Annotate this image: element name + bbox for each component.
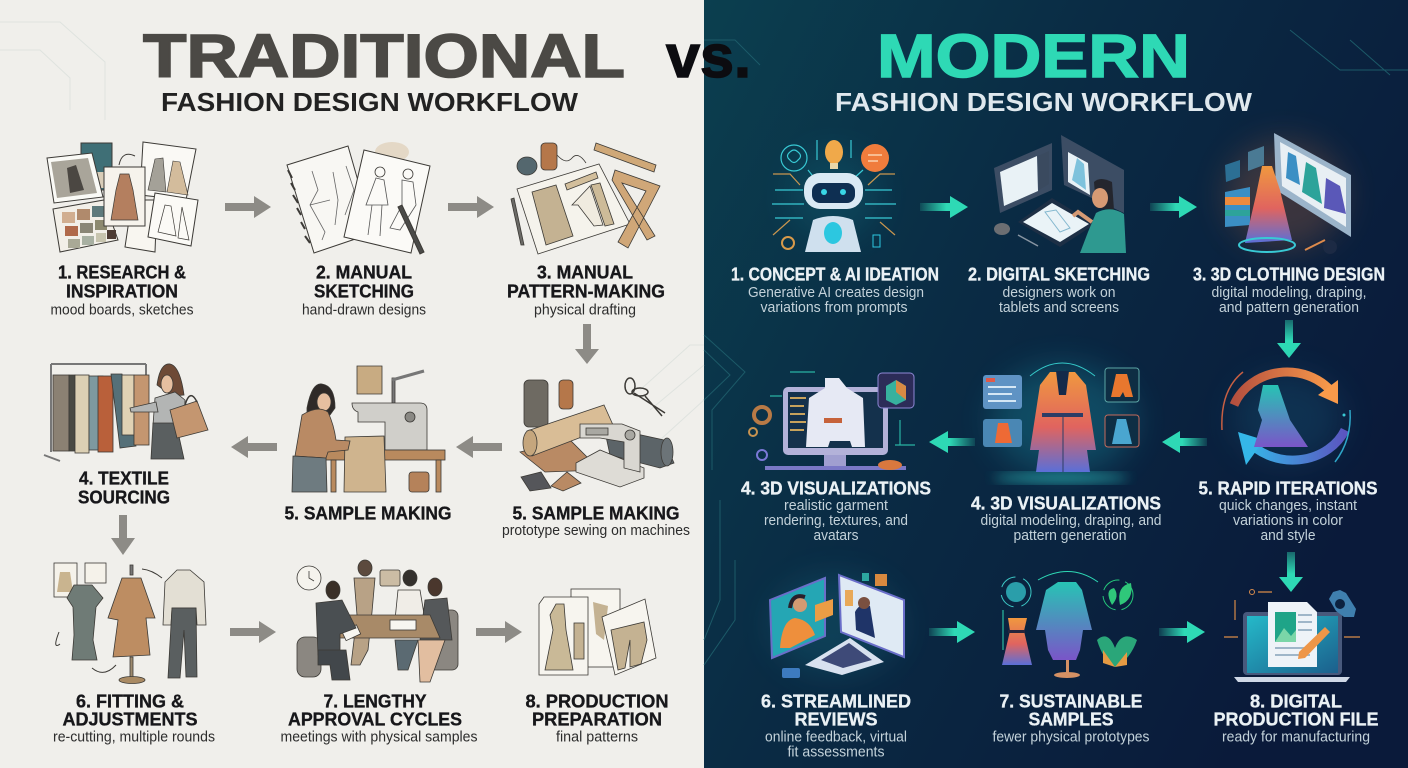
label: 3D visualizations coat: 4. 3D VISUALIZATIONS xyxy=(971,494,1161,514)
arrow: modern step 1 to 2 xyxy=(920,196,968,218)
label: sustainable samples xyxy=(992,692,1150,746)
icon: seamstress at sewing machine xyxy=(292,366,445,492)
step 8: production preparation xyxy=(526,589,668,746)
arrow: step 2 to 3 xyxy=(448,196,494,218)
label: digital sketching xyxy=(968,264,1150,316)
arrow: step 6 to 7 xyxy=(230,621,276,643)
label: sample making with machines: prototype sewing on machines xyxy=(502,523,690,539)
step 5: sample making seamstress xyxy=(284,366,452,524)
arrow: modern step 3 down xyxy=(1277,320,1301,358)
label: textile sourcing: 4. TEXTILE xyxy=(79,468,169,488)
arrow: sewing to textile sourcing xyxy=(231,436,277,458)
label: streamlined reviews: online feedback, virtual xyxy=(765,730,907,746)
label: concept and AI ideation: 1. CONCEPT & AI IDEATION xyxy=(731,264,939,284)
label: production preparation: PREPARATION xyxy=(532,710,662,730)
icon: jacket on monitor xyxy=(749,372,915,470)
icon: glowing 3D coat with panels xyxy=(983,363,1139,482)
label: 3D clothing design: digital modeling, draping, xyxy=(1212,285,1366,301)
label: digital production file xyxy=(1214,692,1378,746)
label: sample making: 5. SAMPLE MAKING xyxy=(284,504,452,524)
label: 3D clothing design xyxy=(1193,264,1385,316)
arrow: step 3 down xyxy=(575,324,599,364)
step 8: digital production file xyxy=(1214,590,1378,746)
step 6: fitting and adjustments xyxy=(53,563,215,746)
label: concept and AI ideation: Generative AI creates design xyxy=(748,285,924,301)
label: sustainable samples: fewer physical prototypes xyxy=(992,730,1150,746)
label: digital production file: ready for manufacturing xyxy=(1222,730,1370,746)
panel: modern background xyxy=(704,0,1408,768)
label: research and inspiration: 1. RESEARCH & xyxy=(58,262,186,282)
subtitle: modern: FASHION DESIGN WORKFLOW xyxy=(835,87,1252,117)
label: 3D visualizations coat: pattern generation xyxy=(1014,528,1126,544)
label: digital sketching: 2. DIGITAL SKETCHING xyxy=(968,264,1150,284)
icon: meeting with samples xyxy=(297,560,458,682)
step 1: concept and AI ideation xyxy=(731,140,939,316)
label: streamlined reviews: REVIEWS xyxy=(794,710,878,730)
title: vs.: vs. xyxy=(666,23,751,90)
arrow: modern step 5 down xyxy=(1279,552,1303,592)
label: textile sourcing: SOURCING xyxy=(78,488,170,508)
label: sample making with machines: 5. SAMPLE MAKING xyxy=(512,504,680,524)
step 7: sustainable samples xyxy=(992,571,1150,746)
label: manual sketching: hand-drawn designs xyxy=(302,302,426,318)
label: production preparation: final patterns xyxy=(556,730,638,746)
label: digital production file: 8. DIGITAL xyxy=(1250,692,1342,712)
label: textile sourcing xyxy=(78,468,170,508)
label: sample making with machines xyxy=(502,504,690,539)
label: rapid iterations xyxy=(1198,478,1378,544)
arrow: iterations to visualization xyxy=(1162,431,1207,453)
label: concept and AI ideation: variations from prompts xyxy=(760,300,908,316)
step 3: manual pattern-making xyxy=(507,143,665,318)
label: manual pattern-making xyxy=(507,262,665,318)
arrow: modern step 6 to 7 xyxy=(929,621,975,643)
label: streamlined reviews: fit assessments xyxy=(788,744,884,760)
label: research and inspiration: mood boards, sketches xyxy=(50,302,194,318)
label: lengthy approval cycles: 7. LENGTHY xyxy=(324,692,426,712)
panel: traditional background xyxy=(0,0,704,768)
subtitle: traditional: FASHION DESIGN WORKFLOW xyxy=(161,87,578,117)
label: lengthy approval cycles: APPROVAL CYCLES xyxy=(288,710,462,730)
label: research and inspiration: INSPIRATION xyxy=(66,282,178,302)
icon: robe, dress and plants xyxy=(1001,571,1137,678)
label: sustainable samples: 7. SUSTAINABLE xyxy=(1000,692,1142,712)
arrow: textile sourcing down xyxy=(111,515,135,555)
label: digital sketching: tablets and screens xyxy=(999,300,1119,316)
label: manual pattern-making: 3. MANUAL xyxy=(537,262,633,282)
arrow: step 1 to 2 xyxy=(225,196,271,218)
label: fitting and adjustments: re-cutting, multiple rounds xyxy=(53,730,215,746)
label: research and inspiration xyxy=(50,262,194,318)
arrow: materials to sewing xyxy=(456,436,502,458)
step 6: streamlined reviews xyxy=(761,573,911,760)
label: fitting and adjustments xyxy=(53,692,215,746)
step 2: digital sketching xyxy=(968,135,1150,316)
icon: video review on screens and laptop xyxy=(770,573,904,678)
step 4: 3D visualizations coat xyxy=(971,363,1162,544)
label: 3D visualizations monitor: 4. 3D VISUALIZATIONS xyxy=(741,478,931,498)
icon: designer with tablet and screens xyxy=(994,135,1126,253)
step 4: 3D visualizations monitor xyxy=(741,372,931,544)
label: digital sketching: designers work on xyxy=(1002,285,1116,301)
label: 3D clothing design: and pattern generation xyxy=(1219,300,1359,316)
icon: AI robot xyxy=(772,140,896,252)
label: 3D visualizations monitor: realistic garment xyxy=(784,498,888,514)
label: rapid iterations: 5. RAPID ITERATIONS xyxy=(1198,478,1378,498)
label: rapid iterations: and style xyxy=(1260,528,1316,544)
icon: final paper patterns xyxy=(539,589,656,675)
icon: laptop with document xyxy=(1224,590,1360,682)
icon: mood board xyxy=(47,142,198,252)
label: digital production file: PRODUCTION FILE xyxy=(1214,710,1378,730)
step 4: textile sourcing xyxy=(44,364,208,508)
step 1: research and inspiration xyxy=(47,142,198,318)
icon: pattern tools xyxy=(511,143,660,254)
label: rapid iterations: variations in color xyxy=(1233,513,1343,529)
label: lengthy approval cycles: meetings with physical samples xyxy=(280,730,478,746)
panel: traditional workflow xyxy=(44,142,690,746)
label: 3D visualizations monitor: rendering, textures, and xyxy=(764,513,908,529)
title: TRADITIONAL: TRADITIONAL xyxy=(143,22,625,90)
icon: garment rack and shopper xyxy=(44,364,208,461)
step 3: 3D clothing design xyxy=(1193,133,1385,316)
label: lengthy approval cycles xyxy=(280,692,478,746)
label: concept and AI ideation xyxy=(731,264,939,316)
arrow: coat to monitor xyxy=(929,431,975,453)
label: rapid iterations: quick changes, instant xyxy=(1219,498,1357,514)
arrow: modern step 2 to 3 xyxy=(1150,196,1197,218)
label: 3D clothing design: 3. 3D CLOTHING DESIGN xyxy=(1193,264,1385,284)
panel: modern workflow xyxy=(731,133,1385,760)
label: sustainable samples: SAMPLES xyxy=(1028,710,1114,730)
label: manual pattern-making: physical drafting xyxy=(534,302,636,318)
step 2: manual sketching xyxy=(287,142,430,318)
arrow: modern step 7 to 8 xyxy=(1159,621,1205,643)
label: 3D visualizations monitor xyxy=(741,478,931,544)
icon: 3D garment and monitor xyxy=(1225,133,1351,254)
label: streamlined reviews xyxy=(761,692,911,760)
label: manual sketching xyxy=(302,262,426,318)
label: 3D visualizations coat: digital modeling, draping, and xyxy=(980,513,1162,529)
label: manual sketching: 2. MANUAL xyxy=(316,262,412,282)
label: 3D visualizations coat xyxy=(971,494,1162,544)
step 5: rapid iterations xyxy=(1198,372,1378,544)
icon: threads, fabric and sewing machine xyxy=(520,378,674,491)
icon: sketchbook with figures xyxy=(287,142,430,254)
label: production preparation xyxy=(526,692,668,746)
icon: iteration cycle with coat xyxy=(1222,372,1350,465)
label: fitting and adjustments: ADJUSTMENTS xyxy=(62,710,198,730)
label: production preparation: 8. PRODUCTION xyxy=(526,692,668,712)
label: streamlined reviews: 6. STREAMLINED xyxy=(761,692,911,712)
label: 3D visualizations monitor: avatars xyxy=(814,528,858,544)
label: manual pattern-making: PATTERN-MAKING xyxy=(507,282,665,302)
icon: garments on mannequin xyxy=(54,563,206,684)
label: manual sketching: SKETCHING xyxy=(314,282,414,302)
title: MODERN: MODERN xyxy=(877,22,1190,90)
label: fitting and adjustments: 6. FITTING & xyxy=(76,692,184,712)
step 7: lengthy approval cycles xyxy=(280,560,478,746)
arrow: step 7 to 8 xyxy=(476,621,522,643)
step 5: sample making materials xyxy=(502,378,690,539)
